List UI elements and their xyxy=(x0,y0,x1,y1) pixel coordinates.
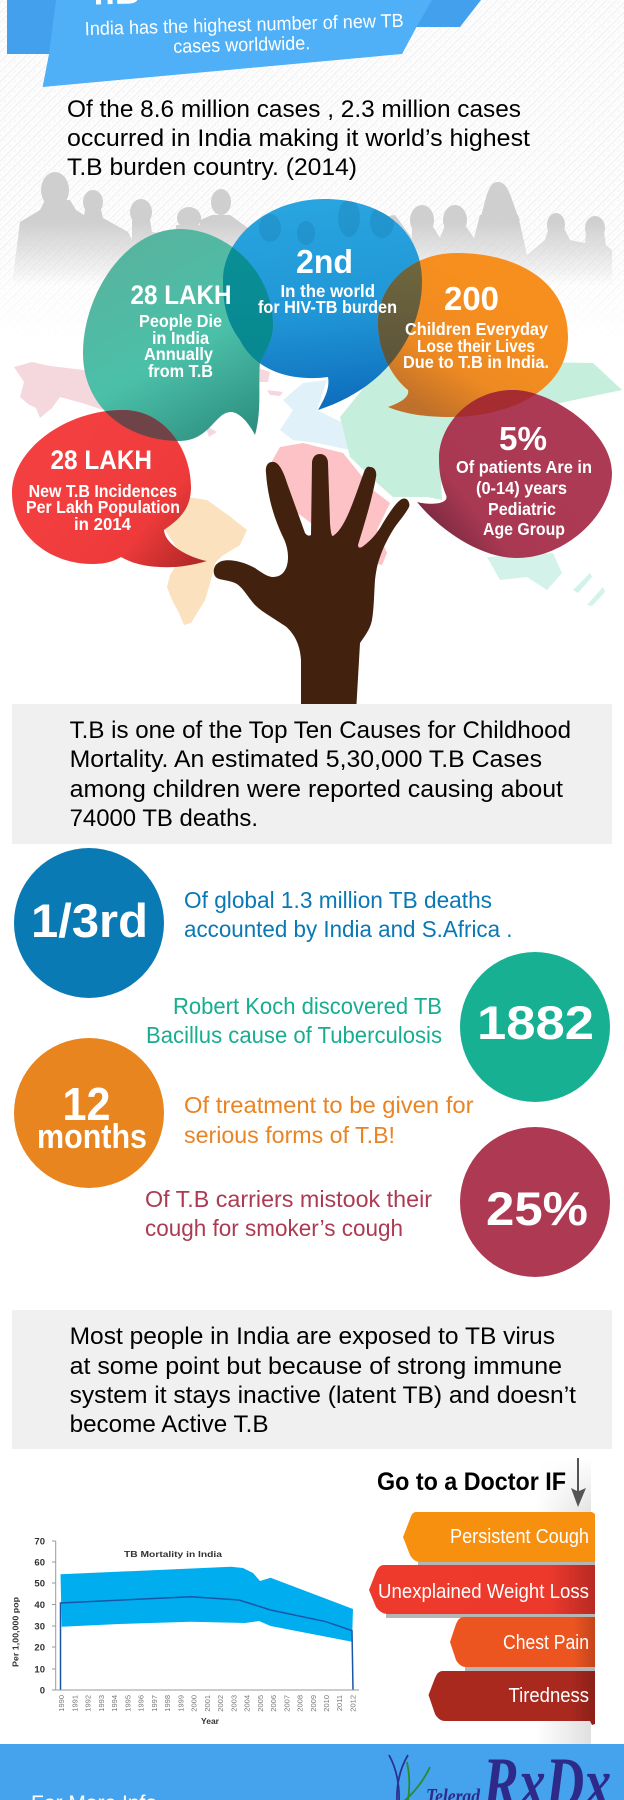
chart x axis labels: 1993 xyxy=(97,1695,106,1712)
chart x axis labels: 2010 xyxy=(322,1695,331,1712)
doctor heading: Go to a Doctor IF xyxy=(377,1468,566,1496)
chart band xyxy=(60,1567,353,1642)
stat: 12 months xyxy=(14,1038,474,1188)
stat: 12 months: 12 xyxy=(62,1078,110,1130)
bubble text: 5 percent pediatric: Of patients Are in xyxy=(456,457,592,477)
panel: latent TB xyxy=(12,1310,612,1449)
panel: latent TB: Most people in India are exposed to TB virus xyxy=(70,1323,555,1350)
chart x axis labels: 2001 xyxy=(203,1695,212,1712)
footer xyxy=(0,1743,624,1800)
stat: 1882: Bacillus cause of Tuberculosis xyxy=(146,1022,442,1048)
stat: 12 months: Of treatment to be given for xyxy=(184,1092,474,1118)
panel: childhood mortality: Mortality. An estimated 5,30,000 T.B Cases xyxy=(70,746,542,773)
bubble shape: green xyxy=(83,229,273,441)
tab: tiredness xyxy=(428,1671,595,1725)
chart x axis title: Year xyxy=(201,1716,220,1726)
chart x axis labels: 2006 xyxy=(269,1695,278,1712)
arrow down xyxy=(571,1458,586,1507)
chart x axis labels: 2004 xyxy=(243,1695,252,1712)
chart x axis labels: 2007 xyxy=(282,1695,291,1712)
stat: 1882: 1882 xyxy=(477,996,594,1049)
stat: 12 months: months xyxy=(37,1118,147,1156)
bubble text: 2nd in the world: 2nd xyxy=(296,243,353,280)
chart x axis labels: 1995 xyxy=(123,1695,132,1712)
chart x axis labels: 1990 xyxy=(57,1695,66,1712)
chart x axis labels: 1992 xyxy=(84,1695,93,1712)
banner front ribbon xyxy=(43,0,432,87)
chart mean line xyxy=(60,1597,353,1690)
bubble text: 28 lakh deaths xyxy=(130,280,232,381)
chart y axis labels: 20 xyxy=(34,1642,45,1654)
chart x axis labels: 1999 xyxy=(176,1695,185,1712)
chart y axis labels: 60 xyxy=(34,1558,45,1568)
map: south america xyxy=(165,497,247,625)
bubble text: 28 lakh deaths: 28 LAKH xyxy=(130,280,232,310)
chart title: TB Mortality in India xyxy=(124,1549,222,1559)
intro paragraph: T.B burden country. (2014) xyxy=(67,154,357,181)
stat: 1/3rd xyxy=(14,848,512,998)
intro paragraph: occurred in India making it world’s highest xyxy=(67,125,530,152)
chart x axis labels: 2005 xyxy=(256,1695,265,1712)
tab: unexplained weight loss xyxy=(369,1565,595,1618)
crowd silhouette xyxy=(12,172,612,285)
bubble text: 28 lakh deaths: from T.B xyxy=(148,361,213,381)
chart x axis labels: 2008 xyxy=(296,1695,304,1712)
chart x axis labels: 1994 xyxy=(110,1695,119,1712)
chart y axis labels: 30 xyxy=(34,1622,45,1632)
chart x axis labels: 2012 xyxy=(348,1695,358,1712)
panel: childhood mortality xyxy=(12,704,612,844)
bubble text: 28 lakh deaths: in India xyxy=(152,328,209,348)
map: europe xyxy=(280,380,350,450)
world map xyxy=(14,360,622,625)
hatched background xyxy=(0,0,624,297)
tab: tiredness: Tiredness xyxy=(508,1685,589,1707)
chart x axis labels: 1991 xyxy=(70,1695,79,1712)
panel: childhood mortality: T.B is one of the Top Ten Causes for Childhood xyxy=(70,717,571,744)
logo: grass xyxy=(389,1755,430,1800)
bubble shape: blue xyxy=(223,199,420,410)
intro paragraph: Of the 8.6 million cases , 2.3 million cases xyxy=(67,96,521,123)
bubble text: 28 lakh incidences: New T.B Incidences xyxy=(29,481,177,501)
banner xyxy=(7,0,481,87)
chart x axis labels: 2011 xyxy=(335,1695,344,1711)
intro paragraph xyxy=(67,96,530,181)
stat: 25 percent: 25% xyxy=(486,1182,588,1235)
bubble text: 200 children: Due to T.B in India. xyxy=(403,352,549,372)
banner subtitle: India has the highest number of new TB xyxy=(85,11,404,40)
bubble text: 28 lakh incidences: 28 LAKH xyxy=(50,445,152,475)
bubble text: 200 children: 200 xyxy=(444,280,499,317)
bubble text: 28 lakh incidences: Per Lakh Population xyxy=(26,497,180,517)
bubble text: 200 children: Children Everyday xyxy=(405,319,548,339)
chart y axis labels: 0 xyxy=(40,1686,45,1696)
bubble text: 2nd in the world: In the world xyxy=(280,281,375,301)
map: asia xyxy=(340,360,622,500)
bubble text: 200 children: Lose their Lives xyxy=(417,336,535,356)
banner subtitle: cases worldwide. xyxy=(173,33,311,58)
chart axes xyxy=(52,1541,359,1690)
bubble shape: orange xyxy=(378,253,568,417)
bubble text: 28 lakh incidences xyxy=(26,445,180,534)
tab: persistent cough xyxy=(403,1512,595,1566)
stat: 1882: Robert Koch discovered TB xyxy=(173,993,442,1019)
chart x axis labels: 2000 xyxy=(190,1695,199,1712)
chart y axis title: Per 1,00,000 pop xyxy=(10,1597,20,1667)
banner back ribbon xyxy=(7,0,481,54)
bubble text: 5 percent pediatric: Pediatric xyxy=(488,499,556,519)
doctor checklist xyxy=(369,1458,595,1744)
tab: unexplained weight loss: Unexplained Weight Loss xyxy=(378,1581,589,1603)
stat: 1/3rd: Of global 1.3 million TB deaths xyxy=(184,887,492,913)
stat: 12 months: serious forms of T.B! xyxy=(184,1122,395,1148)
bubble text: 2nd in the world xyxy=(258,243,397,317)
bubble text: 28 lakh incidences: in 2014 xyxy=(74,514,131,534)
chart y axis labels: 70 xyxy=(34,1536,45,1548)
bubble text: 28 lakh deaths: People Die xyxy=(139,311,222,331)
chart y axis labels xyxy=(34,1536,45,1696)
bubble text: 200 children xyxy=(403,280,549,372)
chart x axis labels: 1998 xyxy=(163,1695,172,1712)
stat: 25 percent: cough for smoker’s cough xyxy=(145,1215,403,1241)
bubble text: 5 percent pediatric: (0-14) years xyxy=(476,478,567,498)
speech bubble shapes xyxy=(12,199,612,567)
stat: 1882 xyxy=(146,952,610,1102)
tab: persistent cough: Persistent Cough xyxy=(450,1526,589,1548)
bubble text: 5 percent pediatric: Age Group xyxy=(483,519,565,539)
bubble shape: red xyxy=(12,410,207,567)
panel: latent TB: at some point but because of strong immune xyxy=(70,1353,562,1380)
panel: latent TB: system it stays inactive (latent TB) and doesn’t xyxy=(70,1382,576,1409)
bubble text: 5 percent pediatric xyxy=(456,420,592,539)
hand xyxy=(214,454,409,704)
chart y axis labels: 10 xyxy=(34,1664,45,1676)
panel: childhood mortality: among children were reported causing about xyxy=(70,776,563,803)
chart: TB mortality in India xyxy=(10,1536,359,1726)
map: north america xyxy=(14,362,283,437)
panel: childhood mortality: 74000 TB deaths. xyxy=(70,805,258,832)
chart x axis labels: 2009 xyxy=(309,1695,318,1712)
stat: 25 percent: Of T.B carriers mistook their xyxy=(145,1186,432,1212)
chart y axis labels: 50 xyxy=(34,1578,45,1590)
chart x axis labels xyxy=(57,1695,357,1712)
fold shadow xyxy=(535,1458,592,1744)
banner subtitle xyxy=(85,11,404,60)
map: africa xyxy=(267,443,390,565)
panel: latent TB: become Active T.B xyxy=(70,1411,269,1438)
chart y axis labels: 40 xyxy=(34,1600,45,1611)
chart x axis labels: 1997 xyxy=(150,1695,159,1712)
map: australia xyxy=(487,553,605,606)
chart x axis labels: 2002 xyxy=(216,1695,225,1712)
chart x axis labels: 1996 xyxy=(137,1695,146,1712)
bubble text: 5 percent pediatric: 5% xyxy=(499,420,547,457)
chart x axis labels: 2003 xyxy=(229,1695,238,1712)
bubble text: 2nd in the world: for HIV-TB burden xyxy=(258,297,397,317)
stat: 25 percent xyxy=(145,1127,610,1277)
bubble shape: maroon xyxy=(417,390,612,558)
bubble text: 28 lakh deaths: Annually xyxy=(144,344,213,364)
tab: chest pain xyxy=(450,1617,595,1671)
stat: 1/3rd: accounted by India and S.Africa . xyxy=(184,916,512,942)
tab: chest pain: Chest Pain xyxy=(503,1632,589,1654)
stat: 1/3rd: 1/3rd xyxy=(31,894,148,947)
